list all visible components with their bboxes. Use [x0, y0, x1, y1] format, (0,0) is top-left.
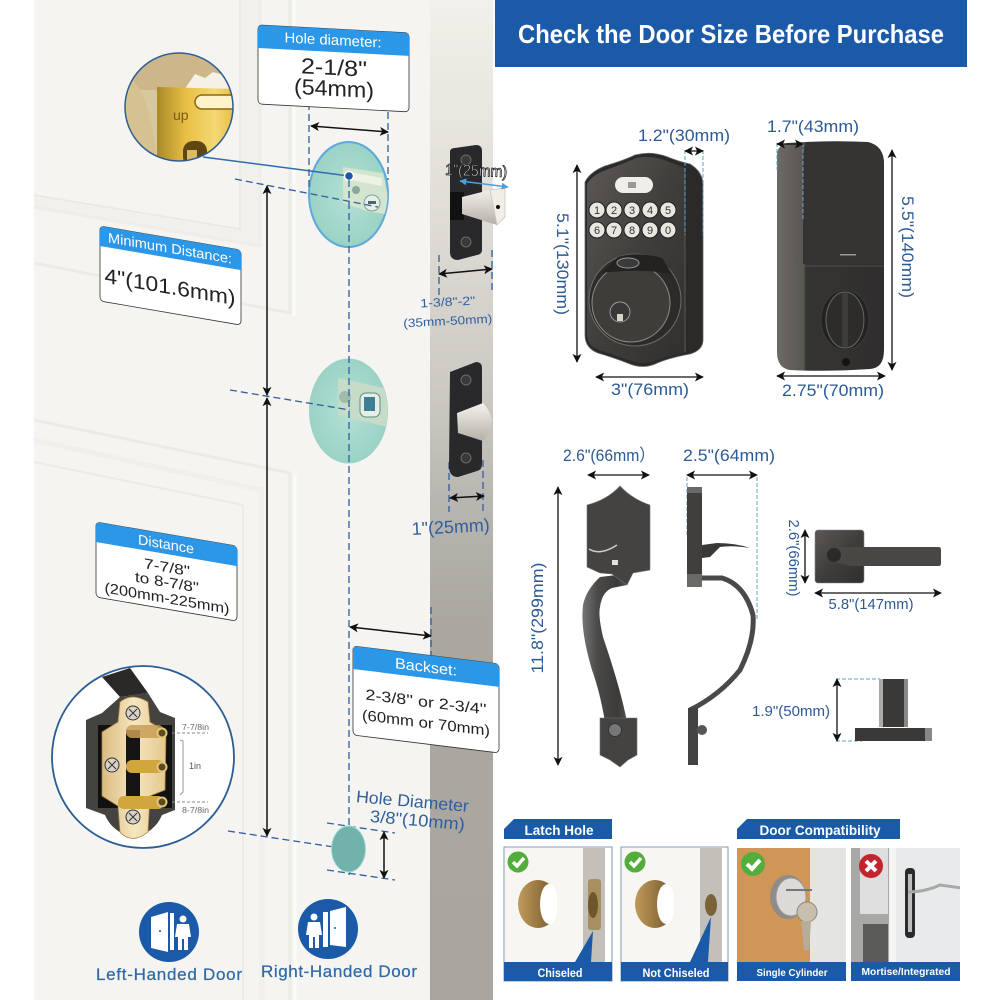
icon: right-handed door	[298, 899, 358, 959]
door illustration	[34, 0, 493, 1000]
door edge	[430, 0, 493, 1000]
label: hole diameter: (54mm)	[294, 74, 374, 103]
label: backset: Backset:	[395, 655, 457, 680]
photo card: chiseled: Chiseled	[538, 966, 582, 980]
tab: door compatibility: Door Compatibility	[760, 822, 881, 838]
hole 1 cross bore with deadbolt	[309, 142, 392, 247]
faceplate width label: (35mm-50mm)	[403, 312, 493, 330]
magnifier: strike plate detail: 8-7/8in	[182, 806, 209, 815]
handle front view	[582, 486, 650, 767]
product dimension labels: 5.5"(140mm)	[898, 196, 917, 298]
label: backset: (60mm or 70mm)	[362, 707, 490, 740]
keypad: 3	[629, 205, 635, 217]
hole diameter 3/8 label	[355, 787, 470, 834]
photo card: mortise integrated: Mortise/Integrated	[862, 966, 950, 978]
text: right-handed door: Right-Handed Door	[261, 962, 417, 981]
keypad: 4	[647, 205, 653, 217]
lock dashed guides	[685, 143, 880, 741]
lever handle	[815, 530, 941, 583]
magnifier leader line	[203, 157, 354, 180]
magnifier: strike plate detail	[52, 666, 234, 848]
header banner: Check the Door Size Before Purchase	[518, 19, 944, 49]
product dimension labels: 1.7"(43mm)	[767, 117, 859, 136]
product dimension labels: 2.6"(66mm)	[785, 520, 802, 597]
magnifier: strike plate detail: 7-7/8in	[182, 723, 209, 732]
product dimension labels	[528, 117, 917, 720]
photo card: not chiseled	[621, 847, 728, 981]
label: distance: Distance	[138, 531, 194, 557]
bottom plate	[600, 718, 637, 767]
deadbolt cylinder	[589, 254, 681, 346]
text: left-handed door: Left-Handed Door	[96, 965, 242, 984]
label: backset: 2-3/8'' or 2-3/4''	[366, 687, 487, 718]
grip	[582, 573, 633, 722]
smart lock front view	[585, 153, 703, 366]
product dimension labels: 11.8"(299mm)	[528, 562, 547, 674]
label: minimum distance	[100, 226, 241, 325]
hole diameter 3/8 label: 3/8"(10mm)	[369, 807, 466, 834]
tab: door compatibility	[737, 819, 900, 839]
photo card: single cylinder	[737, 848, 846, 981]
product dimension labels: 2.6"(66mm）	[563, 446, 655, 465]
product dimension labels: 5.1"(130mm)	[553, 213, 572, 315]
product dimension labels: 2.75"(70mm)	[782, 381, 884, 400]
screws	[105, 706, 140, 824]
keypad: 9	[647, 225, 653, 237]
smart lock back view	[777, 141, 884, 371]
label: hole diameter: 2-1/8"	[301, 53, 367, 82]
label: hole diameter	[258, 25, 409, 112]
keypad: 7	[611, 225, 617, 237]
faceplate width label	[403, 294, 493, 330]
latch plate	[449, 362, 492, 477]
keypad: 5	[665, 205, 671, 217]
label: distance: 7-7/8"	[144, 556, 190, 580]
keypad: 0	[665, 225, 671, 237]
product dimension arrows	[558, 144, 941, 765]
faceplate width label: 1-3/8"-2"	[420, 294, 476, 310]
label: distance: to 8-7/8"	[135, 570, 199, 597]
product dimension labels: 5.8"(147mm)	[828, 596, 914, 613]
tab: latch hole: Latch Hole	[524, 822, 594, 838]
tab: latch hole	[504, 819, 612, 839]
centre and reference dashed guide lines	[228, 103, 492, 880]
latch width label: 1"(25mm)	[411, 515, 490, 539]
product dimension labels: 2.5"(64mm)	[683, 446, 775, 465]
hole 2 cross bore with latch	[309, 358, 392, 464]
product dimension labels: 1.9"(50mm)	[752, 703, 830, 720]
product dimension labels: 1.2"(30mm)	[638, 126, 730, 145]
photo card: mortise integrated	[851, 848, 962, 981]
gold pins	[118, 725, 166, 809]
keypad	[589, 177, 676, 238]
product dimension labels: 3"(76mm)	[611, 380, 689, 399]
keypad: 8	[629, 225, 635, 237]
label: minimum distance: 4"(101.6mm)	[105, 265, 236, 310]
keypad: 1	[594, 205, 600, 217]
header banner	[495, 0, 967, 67]
hole 3 small through-bolt hole	[332, 826, 366, 872]
icon: left-handed door	[139, 902, 199, 962]
keypad: 6	[594, 225, 600, 237]
top plate	[587, 486, 650, 585]
label: minimum distance: Minimum Distance:	[108, 229, 232, 267]
label: hole diameter: Hole diameter:	[284, 30, 381, 51]
bolt plate	[450, 145, 505, 260]
photo card: not chiseled: Not Chiseled	[642, 966, 710, 980]
handle side view	[687, 487, 753, 765]
label: backset	[353, 646, 499, 753]
label: distance	[96, 522, 237, 621]
dimension arrows on door	[267, 126, 492, 878]
magnifier: strike plate detail: 1in	[189, 761, 201, 771]
magnifier: bolt face detail: up	[173, 107, 189, 123]
magnifier: bolt face detail	[124, 52, 234, 162]
label: distance: (200mm-225mm)	[104, 581, 229, 618]
photo card: chiseled	[504, 847, 612, 981]
deadbolt thumb stud	[855, 679, 932, 741]
keypad: 2	[611, 205, 617, 217]
bolt length label: 1"(25mm)	[445, 162, 507, 181]
hole diameter 3/8 label: Hole Diameter	[355, 787, 470, 816]
photo card: single cylinder: Single Cylinder	[756, 967, 828, 979]
